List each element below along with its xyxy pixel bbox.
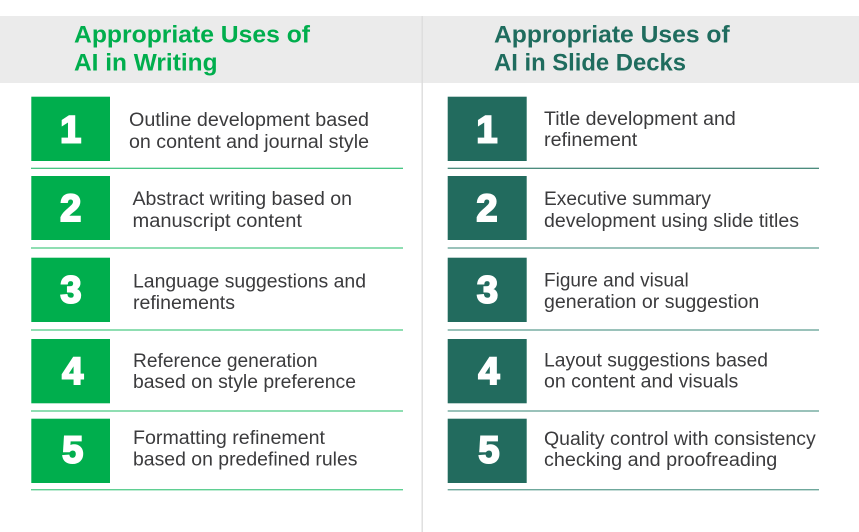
heading: writing: Appropriate Uses of <box>74 22 311 49</box>
item 5: formatting refinement: 5 <box>62 430 83 472</box>
item 2: abstract writing <box>31 176 403 249</box>
item 2: abstract writing: Abstract writing based on <box>132 189 352 210</box>
item 1: outline development: on content and journal style <box>129 132 369 153</box>
item 4: layout suggestions: Layout suggestions based <box>544 351 768 372</box>
item 4: reference generation: 4 <box>62 351 83 393</box>
item 4: reference generation: Reference generation <box>133 351 318 372</box>
item 1: title development: Title development and <box>544 109 736 130</box>
item 4: layout suggestions: on content and visuals <box>544 372 738 393</box>
item 2: abstract writing: 2 <box>60 188 81 230</box>
item 5: formatting refinement: based on predefined rules <box>133 450 358 470</box>
item 1: outline development: Outline development based <box>129 110 369 131</box>
item 5: quality control <box>448 419 819 490</box>
item 5: formatting refinement: Formatting refinement <box>133 428 326 449</box>
item 2: executive summary <box>448 176 819 249</box>
heading: slide decks <box>494 22 731 77</box>
panel: AI in slide decks <box>448 22 819 490</box>
item 5: formatting refinement <box>31 419 403 490</box>
heading: slide decks: AI in Slide Decks <box>494 50 686 77</box>
item 4: layout suggestions <box>448 339 819 412</box>
item 4: reference generation <box>31 339 403 412</box>
item 1: outline development: 1 <box>60 110 81 152</box>
item 2: executive summary: 2 <box>476 188 498 230</box>
item 1: outline development <box>31 97 403 169</box>
item 1: title development: refinement <box>544 130 638 151</box>
item 2: executive summary: Executive summary <box>544 189 711 210</box>
item 5: quality control: 5 <box>478 430 500 472</box>
item 3: figure and visual <box>448 258 819 331</box>
header band <box>0 16 859 83</box>
item 1: title development <box>448 97 819 169</box>
item 3: language suggestions: refinements <box>133 293 235 314</box>
panel: AI in writing <box>31 22 403 490</box>
item 3: language suggestions: Language suggestions and <box>133 272 366 293</box>
item 3: figure and visual: Figure and visual <box>544 271 689 292</box>
item 5: quality control: Quality control with consistency <box>544 429 816 450</box>
item 5: quality control: checking and proofreading <box>544 450 777 471</box>
item 4: reference generation: based on style preference <box>133 372 356 393</box>
item 2: abstract writing: manuscript content <box>132 211 303 232</box>
item 2: executive summary: development using slide titles <box>544 211 799 232</box>
item 3: figure and visual: 3 <box>477 270 498 312</box>
column divider <box>422 16 423 532</box>
heading: writing: AI in Writing <box>74 50 217 77</box>
heading: writing <box>74 22 311 77</box>
item 3: language suggestions <box>31 258 403 331</box>
heading: slide decks: Appropriate Uses of <box>494 22 731 49</box>
item 3: figure and visual: generation or suggestion <box>544 292 759 313</box>
item 3: language suggestions: 3 <box>60 270 82 312</box>
item 1: title development: 1 <box>476 110 498 152</box>
item 4: layout suggestions: 4 <box>478 351 500 393</box>
